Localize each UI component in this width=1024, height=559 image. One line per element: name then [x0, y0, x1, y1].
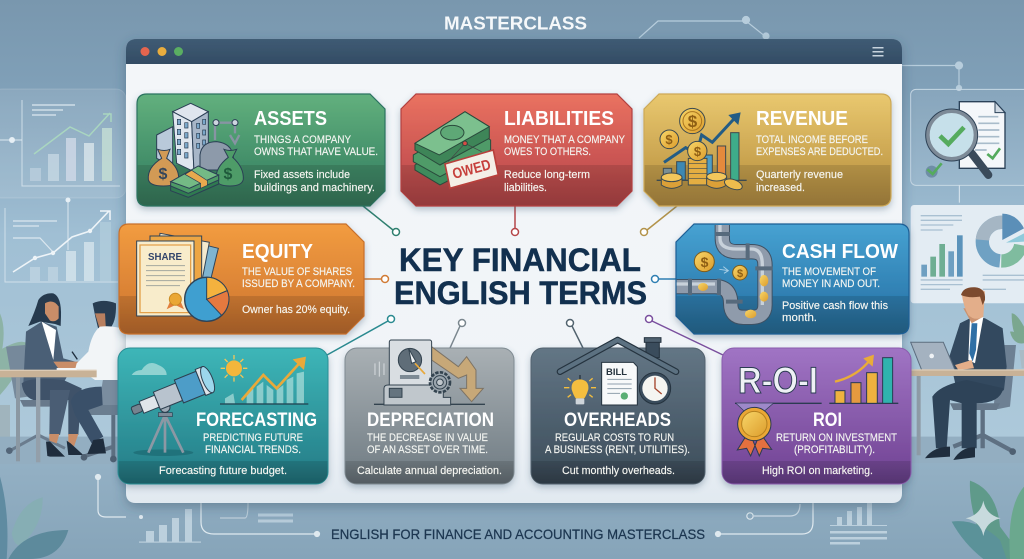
coin symbols: $ — [701, 254, 709, 270]
definition: OF AN ASSET OVER TIME. — [367, 444, 488, 456]
definition — [242, 266, 355, 290]
definition: TOTAL INCOME BEFORE — [756, 134, 868, 146]
decorative circuit: bottom — [96, 474, 813, 536]
mini chart: bottom left — [139, 509, 201, 543]
connector: revenue — [640, 206, 677, 236]
example — [254, 169, 375, 194]
panel: roi — [722, 348, 911, 484]
definition — [254, 134, 378, 158]
connector: overheads — [566, 320, 583, 348]
example: Owner has 20% equity. — [242, 304, 350, 316]
window controls — [140, 47, 183, 56]
example — [504, 169, 590, 194]
example: Cut monthly overheads. — [562, 465, 675, 477]
panel: assets: $ — [224, 166, 233, 183]
decorative circuit: top — [639, 16, 962, 90]
definition: THE MOVEMENT OF — [782, 266, 876, 278]
example — [756, 169, 843, 194]
definition: THE VALUE OF SHARES — [242, 266, 352, 278]
icon: bars and medal — [735, 355, 898, 456]
main title: KEY FINANCIAL — [399, 242, 641, 278]
connector: depreciation — [450, 320, 466, 348]
definition — [203, 432, 303, 456]
connector: liabilities — [512, 206, 518, 236]
example: Forecasting future budget. — [159, 465, 287, 477]
example: month. — [782, 312, 817, 324]
example: Positive cash flow this — [782, 300, 888, 312]
coin symbols: $ — [665, 132, 673, 147]
definition: EXPENSES ARE DEDUCTED. — [756, 146, 883, 158]
connector: roi — [646, 316, 723, 355]
footer caption: ENGLISH FOR FINANCE AND ACCOUNTING MASTERCLASS — [331, 526, 705, 542]
heading: FORECASTING — [196, 410, 317, 431]
main title — [394, 242, 647, 311]
panel: revenue — [644, 94, 891, 206]
example: Calculate annual depreciation. — [357, 465, 502, 477]
example: Quarterly revenue — [756, 169, 843, 181]
browser window — [126, 39, 902, 503]
panel: left growth chart — [0, 89, 126, 198]
coin symbols: $ — [737, 268, 743, 280]
big r-o-i lettering: R-O-I — [738, 360, 818, 401]
example: liabilities. — [504, 182, 547, 194]
icon: coins and rising chart — [657, 108, 747, 192]
heading: masterclass: MASTERCLASS — [444, 14, 587, 34]
heading: DEPRECIATION — [367, 410, 494, 431]
panel: left line chart — [5, 198, 118, 282]
example: High ROI on marketing. — [762, 465, 873, 477]
definition: MONEY IN AND OUT. — [782, 278, 880, 290]
panel: forecasting — [118, 348, 328, 484]
heading: OVERHEADS — [564, 410, 671, 431]
connector: equity — [364, 276, 388, 282]
icon: telescope and trend — [127, 355, 308, 456]
plant: bottom left — [0, 477, 68, 559]
heading: CASH FLOW — [782, 241, 898, 263]
icon: machine and falling arrow — [374, 340, 485, 405]
heading: ASSETS — [254, 108, 327, 130]
definition — [367, 432, 488, 456]
definition: OWES TO OTHERS. — [504, 146, 591, 158]
panel: depreciation — [345, 340, 514, 484]
panel: equity — [119, 224, 364, 334]
definition: MONEY THAT A COMPANY — [504, 134, 626, 146]
example: Fixed assets include — [254, 169, 350, 181]
panel: overheads — [531, 338, 705, 484]
panel: assets: $ — [159, 166, 168, 183]
example — [782, 300, 888, 324]
window title bar — [126, 39, 902, 64]
definition — [504, 134, 626, 158]
definition — [545, 432, 690, 456]
coin symbols: $ — [688, 112, 698, 131]
definition — [782, 266, 880, 290]
heading: LIABILITIES — [504, 108, 614, 130]
example: Reduce long-term — [504, 169, 590, 181]
panel: liabilities — [401, 94, 632, 206]
tag label: OWED — [451, 156, 493, 183]
example: buildings and machinery. — [254, 182, 375, 194]
definition: A BUSINESS (RENT, UTILITIES). — [545, 444, 690, 456]
definition — [756, 134, 883, 158]
definition: OWNS THAT HAVE VALUE. — [254, 146, 378, 158]
coin symbols: $ — [694, 144, 702, 159]
coin symbols — [665, 112, 702, 159]
plant: bottom right — [952, 481, 1024, 559]
definition: THE DECREASE IN VALUE — [367, 432, 488, 444]
connector: cash flow — [652, 276, 676, 282]
icon: house with bill and clock — [560, 338, 676, 405]
icon: cash stack with owed tag — [413, 112, 498, 188]
definition: ISSUED BY A COMPANY. — [242, 278, 355, 290]
panel: report with donut — [911, 205, 1024, 303]
definition: REGULAR COSTS TO RUN — [555, 432, 674, 444]
main title: ENGLISH TERMS — [394, 275, 647, 311]
icon: buildings and money — [148, 103, 243, 197]
illustration: woman and client at desk — [0, 293, 127, 464]
definition: PREDICTING FUTURE — [203, 432, 303, 444]
heading: ROI — [813, 410, 842, 431]
connector: assets — [363, 206, 400, 236]
definition: THINGS A COMPANY — [254, 134, 352, 146]
coin symbols — [701, 254, 743, 280]
connector: forecasting — [327, 316, 394, 355]
example: increased. — [756, 182, 805, 194]
icon: share certificate and pie — [137, 233, 229, 321]
panel: assets — [137, 94, 385, 206]
certificate label: SHARE — [148, 251, 182, 263]
definition: (PROFITABILITY). — [794, 444, 875, 456]
mini chart: bottom right — [830, 503, 887, 544]
panel: magnifier document — [911, 89, 1024, 203]
heading: REVENUE — [756, 108, 848, 130]
icon: pipe with coins — [677, 225, 773, 318]
bill label: BILL — [606, 367, 627, 378]
panel: cash flow — [676, 224, 909, 334]
definition — [776, 432, 897, 456]
definition: FINANCIAL TRENDS. — [205, 444, 301, 456]
definition: RETURN ON INVESTMENT — [776, 432, 897, 444]
heading: EQUITY — [242, 241, 314, 263]
menu icon — [872, 47, 884, 56]
illustration: man at laptop — [911, 287, 1024, 463]
